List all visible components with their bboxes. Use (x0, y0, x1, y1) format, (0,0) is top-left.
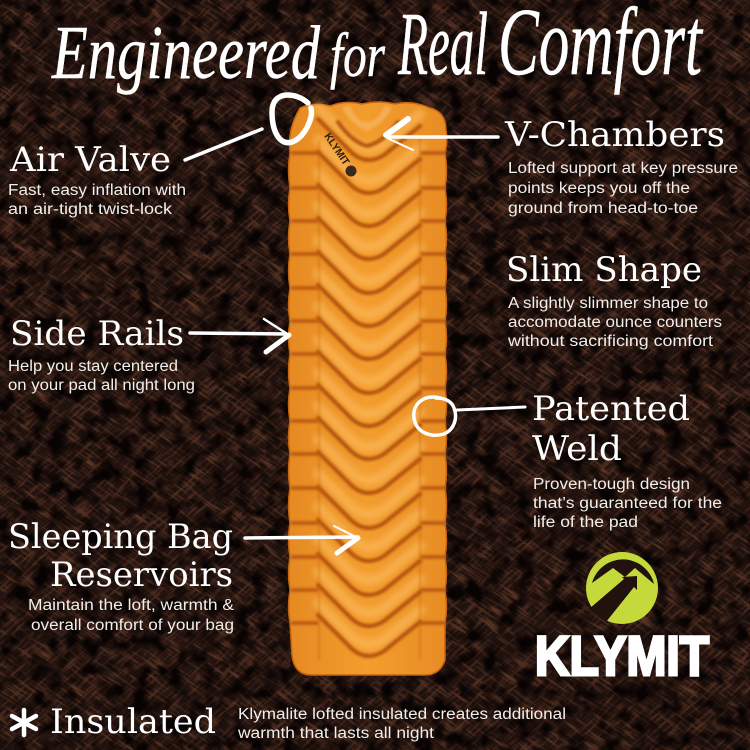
label: side rails: Side Rails (10, 314, 184, 354)
title: Engineered (51, 11, 321, 95)
arrow: sleeping bag reservoirs (245, 526, 358, 553)
arrow: side rails (190, 319, 289, 352)
label: v-chambers: V-Chambers (504, 115, 725, 155)
sleeping pad illustration (288, 102, 447, 675)
chevron highlights (318, 107, 420, 644)
icon: asterisk (12, 710, 36, 735)
label: slim shape: A slightly slimmer shape to (508, 295, 708, 312)
title (51, 0, 703, 95)
label: slim shape: Slim Shape (506, 250, 702, 290)
label: slim shape: without sacrificing comfort (507, 333, 714, 350)
label: side rails (8, 314, 195, 394)
label: air valve: an air-tight twist-lock (8, 201, 172, 218)
pad brand mark: KLYMIT (322, 131, 352, 168)
arrow: v-chambers (386, 119, 498, 150)
label: slim shape: accomodate ounce counters (508, 314, 722, 331)
label: sleeping bag reservoirs: overall comfort of your bag (31, 617, 234, 634)
insulated note: Klymalite lofted insulated creates additional (238, 706, 566, 723)
label: patented weld: that’s guaranteed for the (533, 495, 722, 512)
label: v-chambers: points keeps you off the (508, 180, 690, 197)
label: sleeping bag reservoirs: Reservoirs (50, 555, 233, 595)
label: air valve: Fast, easy inflation with (8, 182, 186, 199)
label: sleeping bag reservoirs: Maintain the loft, warmth & (28, 597, 235, 614)
label: air valve: Air Valve (9, 140, 171, 180)
label: patented weld (532, 389, 722, 531)
label: sleeping bag reservoirs: Sleeping Bag (8, 517, 233, 557)
label: v-chambers: Lofted support at key pressure (508, 160, 738, 177)
insulated note: Insulated (50, 702, 216, 742)
label: side rails: on your pad all night long (8, 377, 195, 394)
label: patented weld: life of the pad (533, 514, 638, 531)
insulated note (12, 702, 566, 742)
label: slim shape (506, 250, 722, 350)
insulated note: warmth that lasts all night (237, 725, 435, 742)
arrow: patented weld (414, 397, 525, 435)
label: patented weld: Patented (532, 389, 690, 429)
arrow: air valve (185, 95, 312, 160)
head pocket (342, 105, 392, 131)
label: v-chambers (504, 115, 738, 217)
title: for (330, 22, 386, 90)
side rail seams (291, 135, 446, 660)
label: v-chambers: ground from head-to-toe (508, 200, 698, 217)
chevron welds (318, 119, 420, 656)
label: patented weld: Proven-tough design (533, 476, 690, 493)
klymit logo: KLYMIT (535, 624, 709, 687)
label: air valve (8, 140, 186, 218)
klymit logo (535, 552, 709, 687)
label: side rails: Help you stay centered (8, 358, 178, 375)
label: patented weld: Weld (532, 429, 622, 469)
icon: mountain arrow roundel (586, 552, 658, 624)
label: sleeping bag reservoirs (8, 517, 235, 634)
pad body (288, 102, 447, 675)
